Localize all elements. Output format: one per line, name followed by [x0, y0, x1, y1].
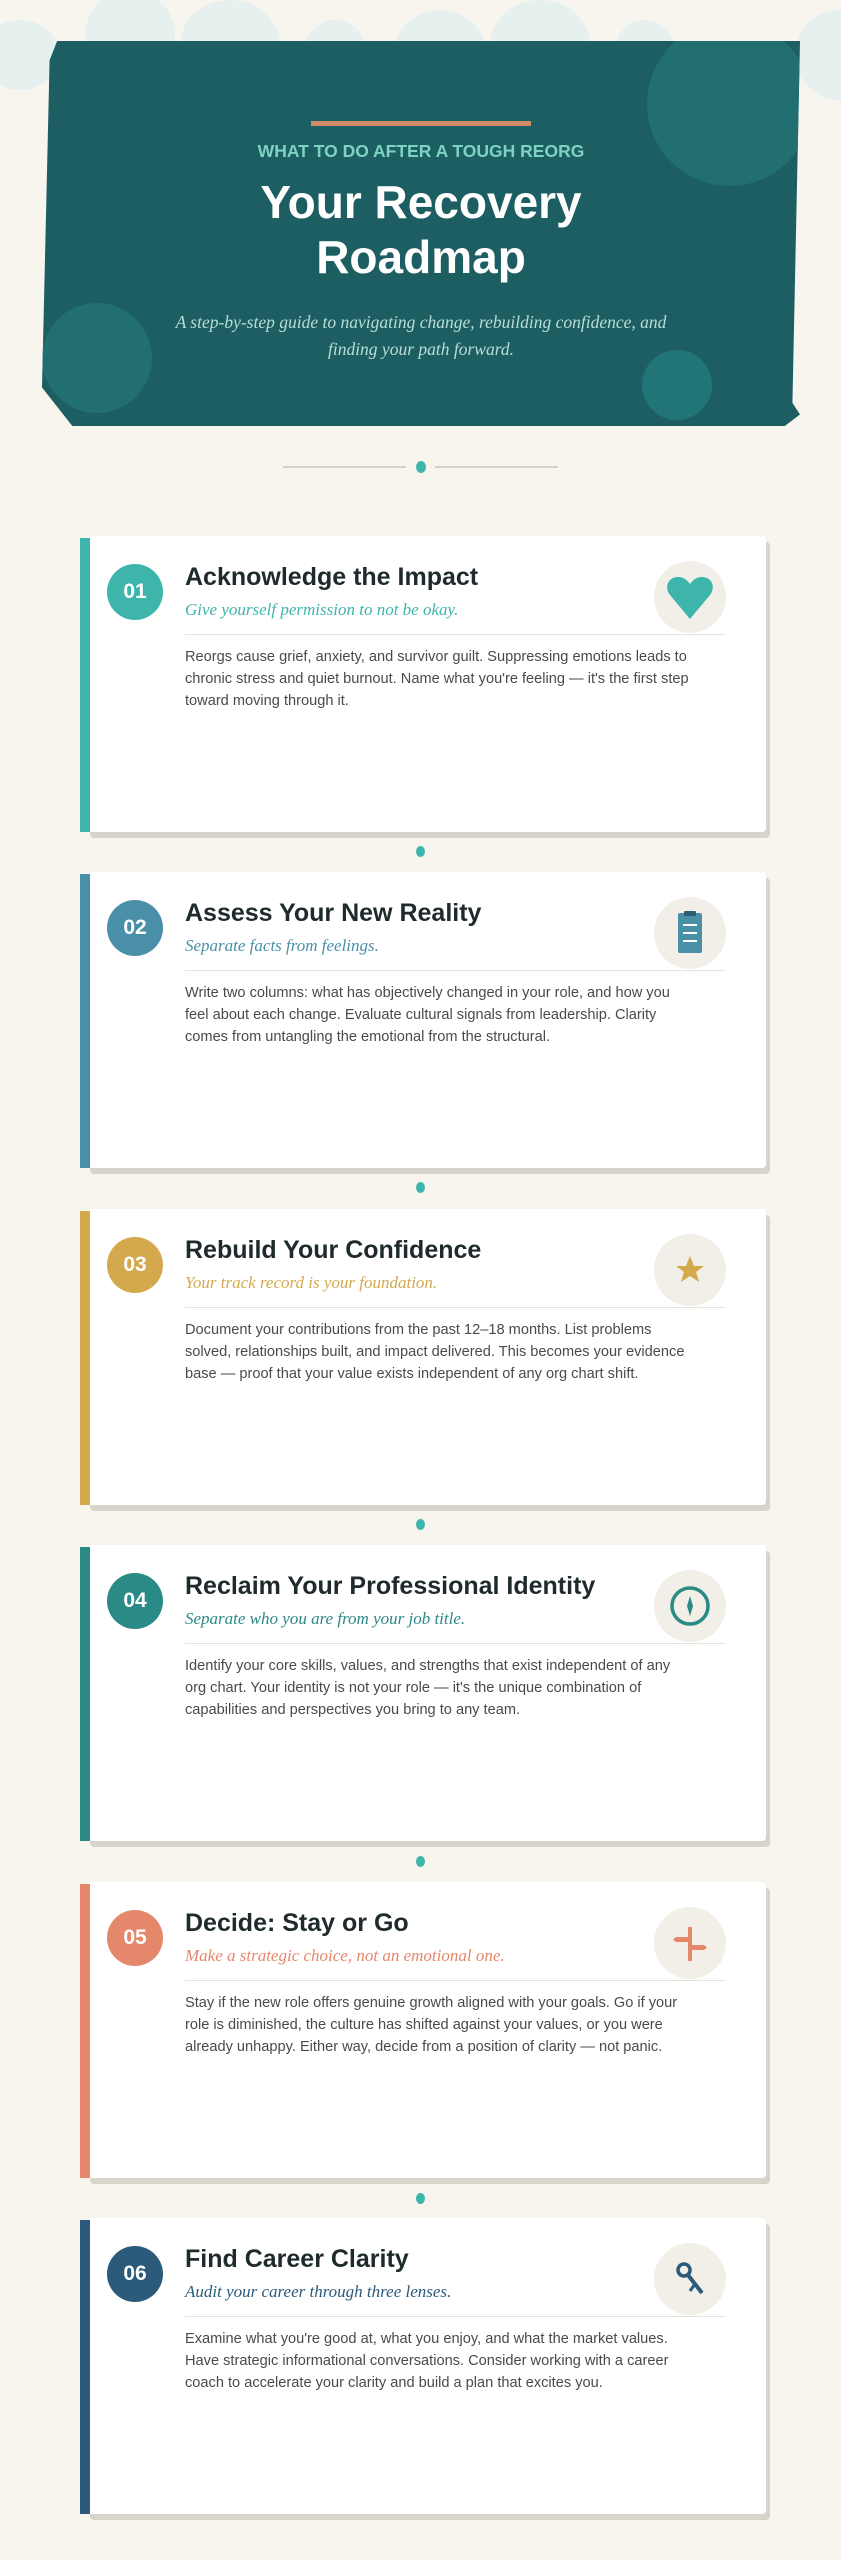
background bubbles — [0, 0, 841, 100]
card 2 — [80, 872, 770, 1174]
icon: star — [654, 1234, 726, 1306]
connector — [416, 846, 425, 857]
number 06: 06 — [123, 2262, 147, 2285]
heading: Acknowledge the Impact — [185, 563, 478, 591]
number 04: 04 — [123, 1589, 147, 1612]
icon: compass — [654, 1570, 726, 1642]
number 01 — [107, 564, 163, 620]
divider ornament — [283, 461, 558, 473]
card 5: Make a strategic choice, not an emotional one. — [185, 1946, 505, 1965]
card 3: Your track record is your foundation. — [185, 1273, 437, 1292]
connector — [416, 1182, 425, 1193]
number 03 — [107, 1237, 163, 1293]
title — [261, 186, 582, 282]
card 4 — [80, 1545, 770, 1847]
number 05: 05 — [123, 1926, 147, 1949]
icon: heart — [654, 561, 726, 633]
number 06 — [107, 2246, 163, 2302]
text: Reorgs cause grief, anxiety, and survivor guilt. Suppressing emotions leads to chronic stress and quiet burnout. Name what you're feeling — it's the first step toward moving through it. — [185, 649, 689, 709]
number 04 — [107, 1573, 163, 1629]
card 1 — [80, 536, 770, 838]
number 01: 01 — [123, 580, 147, 603]
accent line — [311, 121, 531, 126]
title: Roadmap — [316, 231, 526, 283]
text: Document your contributions from the past 12–18 months. List problems solved, relationships built, and impact delivered. This becomes your evidence base — proof that your value exists independent of any org chart shift. — [185, 1322, 684, 1382]
header panel — [42, 41, 800, 426]
card 5 — [80, 1882, 770, 2184]
card 2: Separate facts from feelings. — [185, 936, 379, 955]
number 02: 02 — [123, 916, 147, 939]
text: Stay if the new role offers genuine growth aligned with your goals. Go if your role is diminished, the culture has shifted against your values, or you were already unhappy. Either way, decide from a position of clarity — not panic. — [185, 1995, 677, 2055]
connector — [416, 1856, 425, 1867]
heading: Reclaim Your Professional Identity — [185, 1572, 595, 1600]
card 6: Audit your career through three lenses. — [185, 2282, 451, 2301]
icon: key — [654, 2243, 726, 2315]
title: Your Recovery — [260, 176, 582, 228]
heading: Decide: Stay or Go — [185, 1909, 409, 1937]
card 1: Give yourself permission to not be okay. — [185, 600, 458, 619]
heading: Assess Your New Reality — [185, 899, 481, 927]
icon: clipboard — [654, 897, 726, 969]
number 03: 03 — [123, 1253, 147, 1276]
heading: Rebuild Your Confidence — [185, 1236, 481, 1264]
number 05 — [107, 1910, 163, 1966]
connector — [416, 1519, 425, 1530]
connector — [416, 2193, 425, 2204]
card 6 — [80, 2218, 770, 2520]
heading: Find Career Clarity — [185, 2245, 409, 2273]
kicker: WHAT TO DO AFTER A TOUGH REORG — [258, 141, 584, 161]
icon: signpost — [654, 1907, 726, 1979]
text: Examine what you're good at, what you enjoy, and what the market values. Have strategic informational conversations. Consider working with a career coach to accelerate your clarity and build a plan that excites you. — [185, 2331, 668, 2391]
number 02 — [107, 900, 163, 956]
card 3 — [80, 1209, 770, 1511]
text: Identify your core skills, values, and strengths that exist independent of any org chart. Your identity is not your role — it's the unique combination of capabilities and perspectives you bring to any team. — [185, 1658, 670, 1718]
card 4: Separate who you are from your job title. — [185, 1609, 465, 1628]
text: Write two columns: what has objectively changed in your role, and how you feel about each change. Evaluate cultural signals from leadership. Clarity comes from untangling the emotional from the structural. — [185, 985, 670, 1045]
tagline: A step-by-step guide to navigating change, rebuilding confidence, and finding your path forward. — [176, 312, 666, 359]
